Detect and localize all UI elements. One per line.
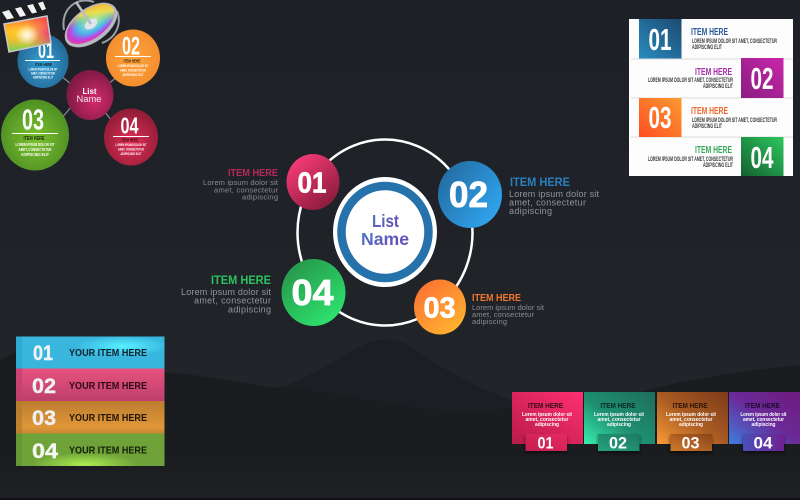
row 01 [16,336,164,368]
bubble 03: 03 [22,104,44,136]
bubble 04: ITEM HERE [122,138,138,142]
hub: list name: Name [361,229,409,249]
bubble 04: AMET, CONSECTETUR [118,148,144,152]
card 03: 03 [682,434,700,452]
node 01: 01 [298,168,326,200]
row 04 [16,434,164,466]
card 01: amet, consectetur [526,417,569,423]
row 01 [639,19,777,58]
card 04: amet, consectetur [743,417,784,423]
text block: item 03: adipiscing [472,317,507,326]
node 04: 04 [292,272,334,313]
panel: top-right list card [629,19,793,176]
bubble 01 [18,34,68,88]
hub: list name: List [372,211,399,231]
bubble 03: LOREM IPSUM DOLOR SIT [16,142,55,147]
text block: item 03: ITEM HERE [472,293,521,304]
row 03: 03 [32,407,56,430]
row 01: YOUR ITEM HERE [69,347,147,359]
bubble 02: AMET, CONSECTETUR [120,68,146,72]
card 03: ITEM HERE [672,403,708,410]
text block: item 01: adipiscing [242,192,278,202]
icon: clapperboard [1,1,51,52]
text block: item 02 [509,177,599,216]
bubble 02: ITEM HERE [124,58,140,64]
card 01 [512,392,583,453]
text block: item 04: amet, consectetur [194,296,271,306]
row 02: LOREM IPSUM DOLOR SIT AMET, CONSECTETUR [648,78,733,84]
row 02: 02 [750,61,774,96]
bubble 04: ADIPISCING ELIT [120,152,142,156]
bubble 04: LOREM IPSUM DOLOR SIT [116,143,147,147]
row 01: 01 [33,342,53,365]
panel: bottom-right cards [512,392,800,453]
text block: item 01: amet, consectetur [214,186,278,194]
text block: item 01: ITEM HERE [228,168,278,179]
card 02: Lorem ipsum dolor sit [594,412,644,418]
text block: item 03 [472,293,545,326]
card 01: Lorem ipsum dolor sit [522,412,572,418]
bubble 04: 04 [120,112,139,138]
row 02: 02 [32,375,56,398]
row 03 [639,98,777,137]
text block: item 03: Lorem ipsum dolor sit [472,303,545,312]
text block: item 01: Lorem ipsum dolor sit [203,178,279,187]
row 01: 01 [648,22,672,57]
bubble: list name: Name [76,94,102,104]
node 01 [286,154,340,210]
text block: item 01 [203,168,279,202]
row 03: YOUR ITEM HERE [69,412,147,424]
bubble 02: LOREM IPSUM DOLOR SIT [118,64,149,68]
connector lines [60,75,118,122]
row 03: ADIPISCING ELIT [692,124,722,130]
text block: item 04 [181,275,271,314]
text block: item 02: amet, consectetur [509,198,586,208]
chart: central ring diagram [282,140,502,334]
mountain silhouette [0,339,800,500]
card 03: amet, consectetur [670,417,713,423]
bubble 02: ADIPISCING ELIT [122,73,144,77]
card 03: Lorem ipsum dolor sit [666,412,716,418]
icon: motion dish [57,0,125,56]
text block: item 04: Lorem ipsum dolor sit [181,287,271,297]
bubble 01: AMET, CONSECTETUR [31,72,55,76]
card 02: ITEM HERE [600,403,636,410]
card 02: adipiscing [607,422,631,428]
row 04: LOREM IPSUM DOLOR SIT AMET, CONSECTETUR [648,157,733,163]
text block: item 02: adipiscing [509,206,552,216]
card 02 [584,392,655,453]
bubble 02: 02 [122,32,140,60]
row 03 [16,401,164,434]
bubble 02 [106,30,160,86]
bubble 03: ADIPISCING ELIT [21,152,49,157]
card 02: 02 [609,434,627,452]
outer ring [298,140,472,326]
row 04: 04 [750,140,774,175]
row 02: ADIPISCING ELIT [703,84,733,90]
bubble 01: LOREM IPSUM DOLOR SIT [28,68,58,72]
bubble 04 [104,108,158,166]
row 02 [16,368,164,401]
text block: item 02: ITEM HERE [510,177,570,189]
bubble 03: ITEM HERE [24,136,45,142]
card 04: 04 [754,434,773,452]
bubble: list name [66,70,114,120]
node 03: 03 [424,292,456,324]
row 04 [648,137,784,176]
text block: item 04: ITEM HERE [211,275,271,287]
card 03 [657,392,728,453]
card 04: ITEM HERE [745,403,780,410]
panel: bottom-left stacked list [16,336,164,466]
row 02: YOUR ITEM HERE [69,380,147,392]
card 01: 01 [538,434,554,452]
card 03: adipiscing [679,422,703,428]
row 04: ADIPISCING ELIT [703,163,733,169]
node 02: 02 [449,174,488,215]
card 01: ITEM HERE [528,403,563,410]
node 02 [438,161,502,228]
text block: item 04: adipiscing [228,304,271,314]
bubble 01: 01 [38,38,54,63]
row 01: ADIPISCING ELIT [692,45,722,51]
text block: item 03: amet, consectetur [472,310,534,319]
hub: list name [333,177,437,287]
row 04: YOUR ITEM HERE [69,444,147,456]
bubble: list name: List [82,86,97,96]
bubble 01: ADIPISCING ELIT [33,76,53,80]
bubble 03 [1,100,69,170]
row 04: ITEM HERE [695,144,732,156]
card 04: Lorem ipsum dolor sit [740,412,787,418]
card 01: adipiscing [535,422,559,428]
card 02: amet, consectetur [598,417,641,423]
text block: item 02: Lorem ipsum dolor sit [509,189,599,199]
row 04: 04 [32,440,58,463]
row 03: 03 [648,100,672,135]
card 04: adipiscing [752,422,776,428]
card 04 [729,392,800,453]
row 02: ITEM HERE [695,66,732,78]
row 01: ITEM HERE [691,26,728,38]
bubble 01: ITEM HERE [35,62,52,67]
node 03 [414,280,466,334]
row 02 [648,58,784,98]
panel: top-left bubble list [1,30,160,170]
row 03: ITEM HERE [691,105,728,117]
bubble 03: AMET, CONSECTETUR [18,147,52,152]
node 04 [282,259,346,326]
